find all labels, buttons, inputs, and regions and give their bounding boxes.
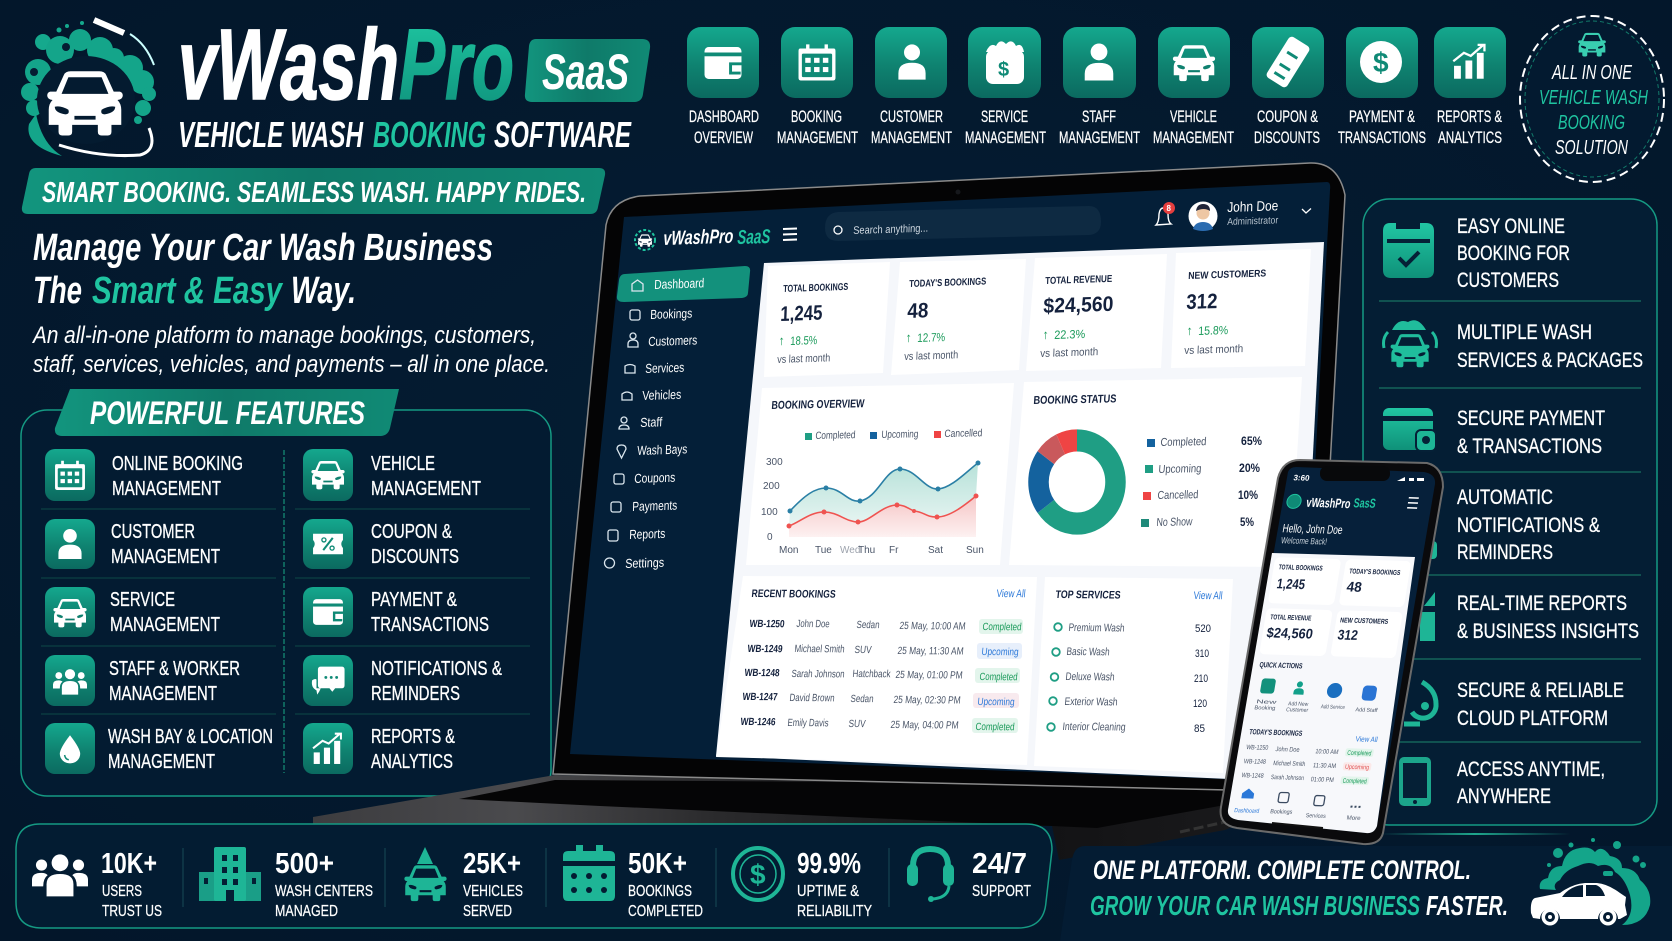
benefit: easy online booking: CUSTOMERS	[1457, 269, 1559, 292]
phone content: Dashboard	[1234, 808, 1260, 815]
tile: booking management	[777, 27, 858, 147]
chart: booking overview: Tue	[815, 545, 832, 556]
table: top services: Deluxe Wash	[1065, 671, 1115, 683]
sidebar: Wash Bays	[637, 441, 688, 458]
sidebar: Staff	[640, 414, 663, 430]
phone content: Bookings	[1270, 809, 1293, 816]
tile: vehicle management: VEHICLE	[1170, 107, 1217, 126]
tile: booking management: MANAGEMENT	[777, 128, 858, 147]
phone content: 312	[1337, 626, 1359, 643]
feature: online booking: MANAGEMENT	[112, 478, 221, 500]
card: total bookings: 18.5%	[790, 333, 818, 348]
table: recent bookings: Hatchback	[852, 668, 892, 680]
phone content: SasS	[1352, 495, 1377, 511]
table: top services: 85	[1194, 723, 1205, 735]
table: recent bookings: 25 May, 11:30 AM	[897, 645, 964, 658]
tile: staff management: STAFF	[1082, 107, 1116, 126]
benefit: secure payment: SECURE PAYMENT	[1457, 407, 1605, 430]
stat: users: 10K+	[101, 848, 157, 880]
card: new customers	[1184, 268, 1267, 357]
chart: booking status donut: 65%	[1241, 436, 1262, 448]
table: top services: Basic Wash	[1066, 646, 1110, 658]
chart: booking status donut: Cancelled	[1157, 489, 1199, 502]
tile: customer management	[871, 27, 952, 147]
benefit: access anywhere: ANYWHERE	[1457, 785, 1551, 808]
card: todays bookings: vs last month	[904, 349, 958, 363]
laptop lid	[553, 163, 1345, 792]
tile: reports analytics: REPORTS &	[1437, 107, 1502, 126]
feature: coupon: COUPON &	[371, 521, 452, 543]
tile: vehicle management: MANAGEMENT	[1153, 128, 1234, 147]
chart: booking overview: Sun	[966, 545, 984, 556]
subtitle: BOOKING	[373, 114, 486, 155]
card: total revenue: $24,560	[1043, 293, 1114, 318]
stat cards	[764, 249, 1311, 377]
chart: booking overview: 0	[767, 532, 773, 543]
benefit: access anywhere	[1399, 757, 1605, 808]
feature: service: SERVICE	[110, 589, 175, 611]
sidebar: Coupons	[634, 470, 676, 486]
table: recent bookings: David Brown	[789, 692, 835, 704]
tile: staff management: MANAGEMENT	[1059, 128, 1140, 147]
phone content: Sarah Johnson	[1270, 774, 1305, 782]
card: total bookings: ↑	[778, 333, 785, 348]
sidebar: Reports	[629, 526, 666, 542]
subtitle	[178, 114, 632, 155]
tile: customer management: MANAGEMENT	[871, 128, 952, 147]
stat: bookings: BOOKINGS	[628, 883, 692, 900]
chart: booking overview: Sat	[928, 545, 943, 556]
panel: powerful features	[21, 389, 551, 796]
card: total revenue: ↑	[1042, 327, 1049, 342]
sidebar: Settings	[625, 555, 665, 571]
phone content: TOTAL REVENUE	[1270, 614, 1312, 622]
tile: reports analytics: ANALYTICS	[1438, 128, 1502, 147]
feature: notifications	[303, 655, 503, 706]
table: top services: Exterior Wash	[1064, 696, 1118, 708]
headline: The	[33, 270, 82, 312]
table: recent bookings: Upcoming	[981, 646, 1019, 658]
table: recent bookings: Michael Smith	[794, 643, 845, 655]
stat: uptime	[733, 848, 872, 920]
table: recent bookings: WB-1248	[744, 667, 780, 679]
table: recent bookings: WB-1249	[747, 643, 783, 655]
phone content: 10:00 AM	[1315, 748, 1339, 756]
sidebar: Dashboard	[654, 275, 705, 292]
table: recent bookings: 25 May, 02:30 PM	[893, 694, 961, 707]
feature: notifications: NOTIFICATIONS &	[371, 658, 503, 680]
phone content: Upcoming	[1344, 764, 1370, 771]
feature: staff: MANAGEMENT	[109, 683, 217, 705]
callout: closing message: GROW YOUR CAR WASH BUSINESS	[1090, 890, 1420, 921]
sidebar: Bookings	[650, 306, 693, 322]
benefit: notifications	[1425, 486, 1600, 564]
top icon row	[687, 27, 1506, 147]
dashboard header: SaaS	[737, 226, 771, 249]
chart: booking status donut: Upcoming	[1158, 463, 1202, 476]
table: recent bookings: SUV	[848, 718, 866, 730]
stat: wash centers	[199, 847, 373, 920]
phone content: QUICK ACTIONS	[1259, 660, 1303, 670]
feature: wash bay: WASH BAY & LOCATION	[108, 726, 273, 748]
benefit: cloud	[1404, 679, 1624, 730]
table: top services: 520	[1195, 623, 1211, 635]
chart: booking status donut: 20%	[1239, 463, 1260, 475]
chart: booking overview: Cancelled	[944, 427, 983, 440]
tile: dashboard overview: OVERVIEW	[694, 128, 753, 147]
phone content	[1232, 473, 1425, 822]
chart: booking overview: Thu	[858, 545, 875, 556]
table: recent bookings: WB-1246	[740, 716, 776, 728]
screen content	[716, 242, 1324, 782]
benefit: easy online booking	[1383, 215, 1570, 292]
table: recent bookings: 25 May, 04:00 PM	[890, 719, 959, 732]
table: recent bookings: Sedan	[856, 619, 880, 631]
phone content: Add New	[1288, 701, 1309, 708]
panel: benefits	[1363, 199, 1657, 825]
chart: booking status donut: Completed	[1160, 436, 1207, 449]
features heading tab	[55, 389, 399, 436]
table: top services: Premium Wash	[1068, 622, 1125, 634]
badge: all in one	[1520, 16, 1664, 182]
feature: notifications: REMINDERS	[371, 683, 460, 705]
description	[31, 322, 550, 378]
benefit: notifications: NOTIFICATIONS &	[1457, 514, 1600, 537]
benefit: secure payment	[1383, 407, 1605, 458]
dashboard header: 8	[1166, 204, 1172, 213]
card: todays bookings: 12.7%	[917, 330, 946, 345]
table: recent bookings: Upcoming	[977, 696, 1015, 708]
tile: coupon discounts: COUPON &	[1257, 107, 1318, 126]
phone content: Hello, John Doe	[1281, 521, 1344, 537]
feature: wash bay: MANAGEMENT	[108, 751, 215, 773]
tile: reports analytics	[1434, 27, 1506, 147]
card: new customers: 312	[1186, 290, 1218, 314]
phone content: Booking	[1254, 705, 1276, 712]
phone content: Completed	[1347, 750, 1372, 757]
phone content: Services	[1305, 813, 1326, 820]
feature: reports: REPORTS &	[371, 726, 455, 748]
tile: service management: $	[998, 59, 1009, 81]
stat: vehicles: SERVED	[463, 903, 512, 920]
card: total bookings: TOTAL BOOKINGS	[783, 282, 849, 295]
tile: dashboard overview: DASHBOARD	[689, 107, 759, 126]
tile: payment transactions	[1338, 27, 1426, 147]
feature: reports: ANALYTICS	[371, 751, 453, 773]
user avatar: Administrator	[1227, 215, 1279, 228]
table: top services: 310	[1195, 648, 1209, 660]
laptop	[313, 163, 1345, 860]
table: recent bookings: Sedan	[850, 693, 874, 705]
phone content: TODAY'S BOOKINGS	[1349, 568, 1401, 577]
table: recent bookings	[716, 576, 1037, 765]
feature: staff: STAFF & WORKER	[109, 658, 240, 680]
feature: coupon: DISCOUNTS	[371, 546, 459, 568]
description: staff, services, vehicles, and payments – all in one place.	[33, 351, 550, 378]
phone content: TODAY'S BOOKINGS	[1249, 727, 1303, 738]
chart: booking overview: BOOKING OVERVIEW	[771, 398, 865, 412]
feature: reports	[303, 723, 455, 774]
stat: bookings: COMPLETED	[628, 903, 703, 920]
sidebar: Payments	[632, 498, 678, 514]
laptop base	[313, 775, 1325, 860]
chart: booking overview: Mon	[779, 545, 798, 556]
phone	[1221, 460, 1443, 844]
benefit: reports: REAL-TIME REPORTS	[1457, 592, 1627, 615]
phone content: $24,560	[1266, 624, 1314, 642]
table: recent bookings: John Doe	[796, 618, 830, 630]
tagline banner: SMART BOOKING. SEAMLESS WASH. HAPPY RIDES.	[42, 177, 586, 209]
table: recent bookings: Emily Davis	[787, 717, 829, 729]
phone content: NEW CUSTOMERS	[1340, 617, 1389, 626]
user avatar: John Doe	[1227, 197, 1279, 215]
table: recent bookings: Completed	[982, 621, 1022, 633]
screen	[570, 182, 1330, 782]
phone content: vWashPro	[1305, 495, 1352, 511]
chart: booking overview	[746, 383, 1014, 565]
phone content: Customer	[1286, 707, 1309, 714]
phone content: 48	[1346, 578, 1363, 595]
card: total revenue: TOTAL REVENUE	[1045, 274, 1113, 287]
chart: booking overview: 100	[761, 507, 778, 518]
stat: users	[32, 848, 162, 920]
stat: support	[907, 848, 1031, 902]
chart: booking status donut: No Show	[1156, 516, 1193, 529]
phone content: WB-1248	[1241, 772, 1264, 780]
phone content: 11:30 AM	[1312, 762, 1337, 770]
stat: vehicles: VEHICLES	[463, 883, 523, 900]
card: new customers: 15.8%	[1198, 323, 1229, 338]
subtitle: VEHICLE WASH	[178, 114, 364, 155]
phone screen	[1228, 467, 1435, 833]
feature: service	[45, 587, 220, 637]
card: total bookings	[777, 282, 849, 366]
tile: service management: SERVICE	[981, 107, 1028, 126]
tile: coupon discounts: DISCOUNTS	[1254, 128, 1320, 147]
feature: wash bay	[45, 723, 273, 774]
table: recent bookings: Completed	[979, 671, 1018, 683]
stat: uptime: $	[750, 859, 766, 890]
feature: payment: PAYMENT &	[371, 589, 458, 611]
benefit: easy online booking: EASY ONLINE	[1457, 215, 1565, 238]
phone content: 01:00 PM	[1310, 776, 1334, 784]
table: recent bookings: WB-1247	[742, 691, 778, 703]
phone content: Completed	[1342, 778, 1367, 785]
sidebar: Services	[645, 360, 685, 376]
benefit: multiple wash services	[1384, 320, 1643, 372]
card: total bookings: 1,245	[780, 302, 823, 326]
callout: closing message	[1060, 833, 1672, 941]
phone content: John Doe	[1275, 746, 1300, 754]
dashboard header	[635, 202, 1175, 250]
logo icon	[21, 20, 156, 156]
phone content: 3:60	[1293, 473, 1311, 483]
table: top services: 120	[1193, 698, 1207, 710]
feature: staff	[45, 655, 240, 706]
tagline banner	[22, 168, 605, 214]
badge: all in one: SOLUTION	[1555, 137, 1628, 159]
table: recent bookings: SUV	[854, 644, 872, 656]
feature: vehicle	[303, 449, 481, 501]
subtitle: SOFTWARE	[494, 114, 632, 155]
phone content: WB-1250	[1246, 744, 1269, 752]
stat: vehicles	[404, 847, 523, 920]
feature: customer: CUSTOMER	[111, 521, 195, 543]
table: recent bookings: 25 May, 01:00 PM	[895, 669, 963, 682]
phone content: View All	[1355, 734, 1379, 744]
phone content: Welcome Back!	[1280, 535, 1328, 547]
chart: booking overview: 200	[763, 481, 780, 492]
panel: stats bar	[16, 824, 1052, 928]
table: top services: TOP SERVICES	[1055, 589, 1121, 602]
user avatar	[1188, 197, 1311, 231]
headline: Way.	[291, 270, 356, 312]
table: top services: View All	[1193, 590, 1223, 602]
chart: booking status donut: 10%	[1238, 490, 1258, 502]
table: top services	[1034, 577, 1233, 773]
table: recent bookings: Completed	[975, 721, 1015, 733]
phone content: Michael Smith	[1273, 760, 1306, 768]
card: todays bookings: ↑	[905, 330, 912, 345]
stat: uptime: RELIABILITY	[797, 903, 872, 920]
headline: Smart & Easy	[92, 270, 283, 312]
tile: service management	[965, 27, 1046, 147]
phone content: More	[1346, 816, 1362, 822]
benefit: reports	[1420, 592, 1639, 643]
card: total bookings: vs last month	[777, 352, 830, 366]
chart: booking overview: Fr	[889, 545, 899, 556]
stat: users: TRUST US	[102, 903, 162, 920]
feature: customer	[45, 519, 220, 569]
table: recent bookings: WB-1250	[749, 618, 785, 630]
card: total revenue	[1040, 274, 1114, 360]
benefit: multiple wash services: MULTIPLE WASH	[1457, 321, 1592, 344]
tile: customer management: CUSTOMER	[880, 107, 943, 126]
feature: service: MANAGEMENT	[110, 614, 220, 636]
sidebar	[604, 266, 750, 571]
stat: support: SUPPORT	[972, 883, 1031, 900]
tile: dashboard overview	[687, 27, 759, 147]
benefit: secure payment: & TRANSACTIONS	[1457, 435, 1602, 458]
description: An all-in-one platform to manage bookings, customers,	[31, 322, 536, 349]
table: recent bookings: 25 May, 10:00 AM	[899, 620, 966, 633]
table: recent bookings: Sarah Johnson	[791, 668, 845, 680]
stat: bookings: 50K+	[628, 848, 687, 880]
card: new customers: vs last month	[1184, 343, 1243, 357]
feature: vehicle: MANAGEMENT	[371, 478, 481, 500]
sidebar: Customers	[648, 332, 698, 349]
phone content: 1,245	[1276, 575, 1306, 592]
feature: payment	[303, 587, 489, 637]
card: todays bookings: 48	[907, 299, 929, 323]
stat: wash centers: 500+	[275, 848, 334, 880]
callout: closing message: FASTER.	[1426, 890, 1508, 921]
features heading tab: POWERFUL FEATURES	[90, 395, 365, 431]
title: vWashPro: vWash	[178, 9, 399, 121]
tile: staff management	[1059, 27, 1140, 147]
icon: car wash side view	[1531, 838, 1650, 926]
benefit: notifications: REMINDERS	[1457, 541, 1553, 564]
phone content: TOTAL BOOKINGS	[1278, 564, 1323, 573]
benefit: cloud: SECURE & RELIABLE	[1457, 679, 1624, 702]
stat: wash centers: MANAGED	[275, 903, 338, 920]
card: total revenue: vs last month	[1040, 346, 1098, 360]
stat: vehicles: 25K+	[463, 848, 521, 880]
headline	[33, 227, 493, 312]
chart: booking status donut: BOOKING STATUS	[1033, 393, 1117, 407]
table: recent bookings: RECENT BOOKINGS	[751, 588, 836, 601]
stat: uptime: UPTIME &	[797, 883, 859, 900]
chart: booking status donut	[1009, 377, 1302, 567]
feature: online booking	[45, 449, 243, 501]
stat: support: 24/7	[972, 848, 1027, 880]
table: recent bookings: View All	[996, 588, 1026, 600]
dashboard header: vWashPro	[663, 226, 734, 250]
card: new customers: NEW CUSTOMERS	[1188, 268, 1267, 282]
benefit: access anywhere: ACCESS ANYTIME,	[1457, 758, 1605, 781]
feature: online booking: ONLINE BOOKING	[112, 453, 243, 475]
benefit: cloud: CLOUD PLATFORM	[1457, 707, 1608, 730]
phone content: New	[1256, 699, 1277, 706]
stat: bookings	[563, 845, 703, 920]
headline: Manage Your Car Wash Business	[33, 227, 493, 269]
badge: SaaS	[525, 39, 650, 102]
benefit: easy online booking: BOOKING FOR	[1457, 242, 1570, 265]
badge: all in one: BOOKING	[1558, 112, 1625, 134]
phone content: Add Staff	[1355, 707, 1378, 714]
tile: payment transactions: PAYMENT &	[1349, 107, 1415, 126]
card: total revenue: 22.3%	[1054, 327, 1086, 342]
stat: uptime: 99.9%	[797, 848, 861, 880]
callout: closing message: ONE PLATFORM. COMPLETE CONTROL.	[1093, 855, 1471, 885]
stat: wash centers: WASH CENTERS	[275, 883, 373, 900]
card: todays bookings	[904, 276, 987, 363]
card: todays bookings: TODAY'S BOOKINGS	[909, 276, 987, 290]
chart: booking overview: 300	[766, 457, 783, 468]
stat: users: USERS	[102, 883, 142, 900]
title: vWashPro: Pro	[399, 9, 514, 121]
tile: coupon discounts	[1252, 27, 1324, 147]
chart: booking overview: Completed	[815, 429, 856, 442]
tile: vehicle management	[1153, 27, 1234, 147]
tile: payment transactions: TRANSACTIONS	[1338, 128, 1426, 147]
chart: booking overview: Upcoming	[881, 428, 919, 441]
card: new customers: ↑	[1186, 323, 1193, 338]
chart: booking status donut: 5%	[1240, 517, 1254, 529]
chart: booking overview: Wed	[840, 545, 860, 556]
feature: coupon	[303, 519, 459, 569]
badge: SaaS: SaaS	[542, 44, 629, 100]
tile: service management: MANAGEMENT	[965, 128, 1046, 147]
feature: customer: MANAGEMENT	[111, 546, 220, 568]
table: top services: Interior Cleaning	[1062, 721, 1126, 734]
table: top services: 210	[1194, 673, 1208, 685]
tile: payment transactions: $	[1373, 47, 1389, 78]
sidebar: Vehicles	[642, 387, 682, 403]
tile: booking management: BOOKING	[791, 107, 842, 126]
feature: vehicle: VEHICLE	[371, 453, 435, 475]
dashboard header: Search anything...	[853, 223, 928, 237]
feature: payment: TRANSACTIONS	[371, 614, 489, 636]
phone frame	[1221, 460, 1443, 844]
badge: all in one: ALL IN ONE	[1551, 62, 1632, 84]
phone content: WB-1248	[1243, 758, 1267, 766]
phone content: Add Service	[1320, 704, 1345, 711]
benefit: notifications: AUTOMATIC	[1457, 486, 1553, 509]
